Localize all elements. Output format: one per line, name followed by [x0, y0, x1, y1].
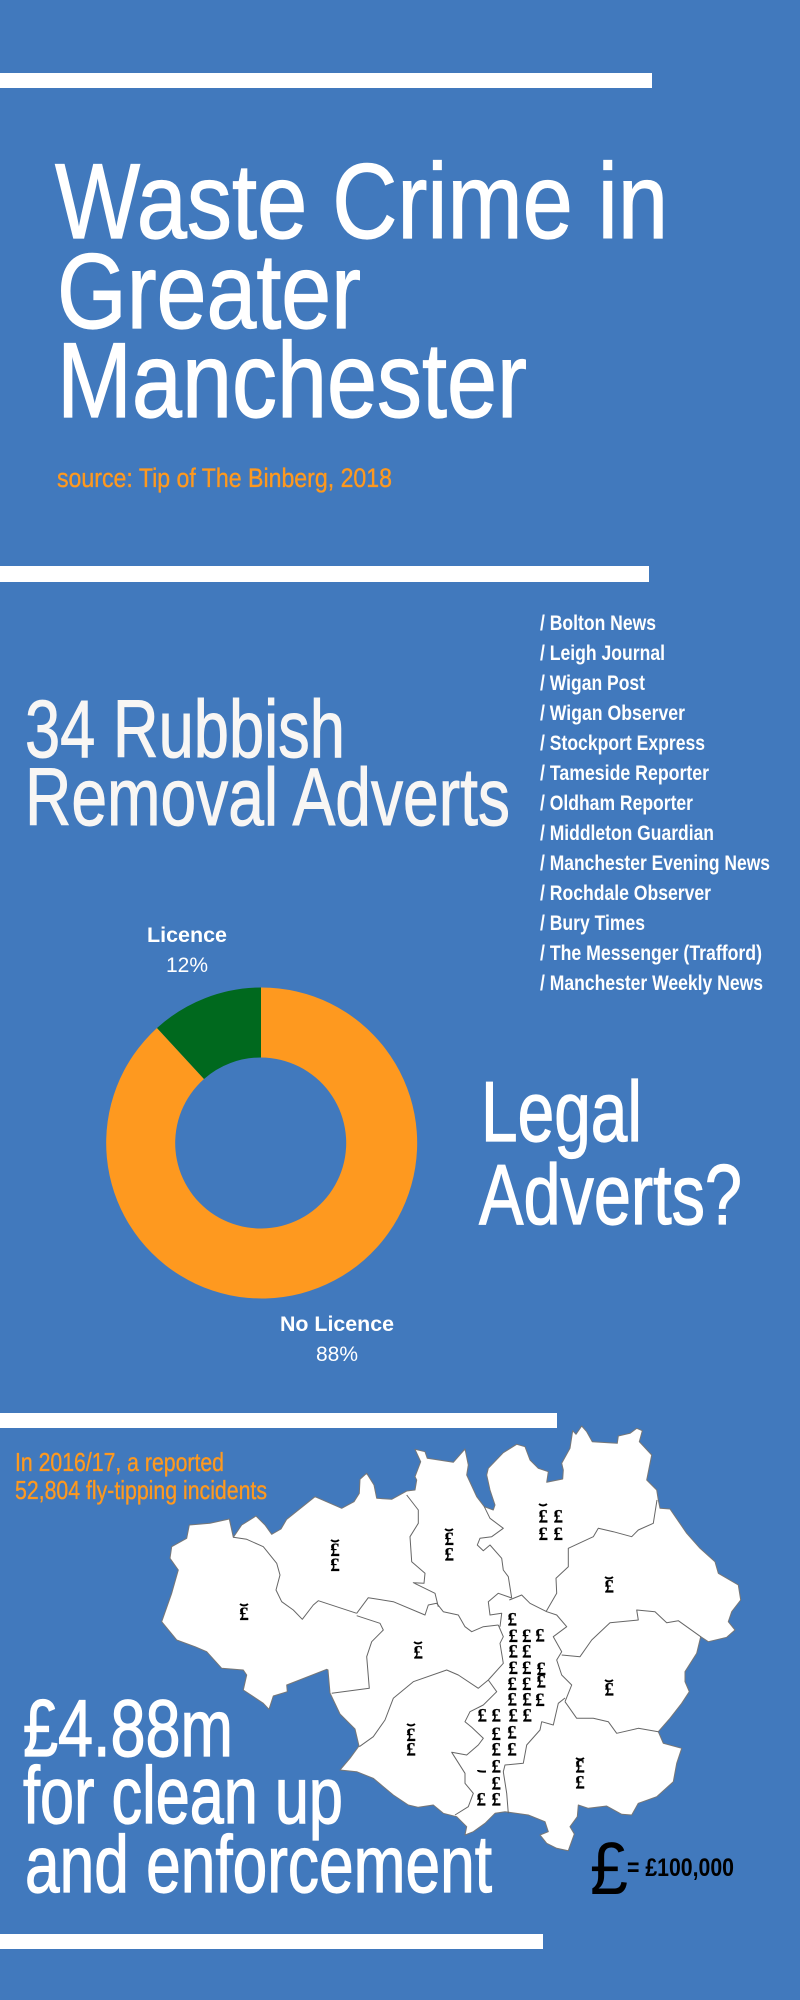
fly-tipping statistic: 52,804 fly-tipping incidents — [15, 1475, 267, 1505]
pound symbols: cost per borough: £ — [575, 1757, 585, 1778]
pound symbols: cost per borough: £ — [523, 1706, 532, 1727]
pound symbols: cost per borough: £ — [508, 1609, 517, 1630]
heading: 34 rubbish removal adverts — [25, 684, 510, 843]
pound symbols: cost per borough: £ — [239, 1604, 249, 1625]
heading: clean up cost: £4.88m — [23, 1684, 233, 1774]
pound symbols: cost per borough: £ — [522, 1641, 531, 1662]
pound symbols: cost per borough: £ — [477, 1789, 486, 1810]
pound symbols: cost per borough: £ — [445, 1529, 454, 1550]
chart label: licence — [147, 924, 227, 977]
map: greater manchester boroughs — [162, 1426, 741, 1851]
newspaper list: / Wigan Post — [540, 672, 645, 695]
pound symbols: cost per borough: £ — [535, 1625, 545, 1646]
chart label: no licence: 88% — [316, 1343, 358, 1366]
pound symbols: cost per borough: £ — [492, 1773, 501, 1794]
segment: licence 12% — [157, 988, 261, 1079]
pound symbols: cost per borough: £ — [508, 1674, 517, 1695]
pound symbols: cost per borough: £ — [330, 1540, 340, 1561]
heading: clean up cost — [23, 1684, 492, 1910]
pound symbols: cost per borough: £ — [507, 1723, 517, 1744]
title — [55, 141, 668, 440]
newspaper list: / Wigan Observer — [540, 702, 685, 725]
title: Manchester — [57, 320, 527, 440]
pound symbols: cost per borough: £ — [509, 1706, 518, 1727]
newspaper list: / Oldham Reporter — [540, 792, 693, 815]
pound symbols: cost per borough: £ — [445, 1545, 454, 1566]
borough boundaries — [233, 1495, 701, 1815]
pound symbols: cost per borough: £ — [535, 1690, 545, 1711]
chart label: licence: 12% — [166, 954, 208, 977]
pound symbols: cost per borough: £ — [492, 1789, 501, 1810]
source line: source: Tip of The Binberg, 2018 — [57, 463, 392, 493]
newspaper list: / Middleton Guardian — [540, 822, 714, 845]
newspaper list: / Leigh Journal — [540, 642, 665, 665]
pound symbols: cost per borough: £ — [507, 1739, 517, 1760]
heading: clean up cost: and enforcement — [25, 1820, 492, 1910]
pound symbols: cost per borough: £ — [554, 1507, 563, 1528]
map legend — [590, 1827, 734, 1910]
pound symbols: cost per borough: £ — [492, 1739, 501, 1760]
donut chart: licence share — [106, 987, 417, 1298]
chart label: licence: Licence — [147, 924, 227, 947]
map outline — [162, 1426, 741, 1851]
pound symbols: cost per borough: £ — [508, 1689, 517, 1710]
pound symbols: cost per borough: £ — [492, 1706, 501, 1727]
pound symbols: cost per borough: £ — [509, 1641, 518, 1662]
pound symbols: cost per borough: £ — [406, 1725, 416, 1746]
pound symbols: cost per borough: £ — [509, 1626, 518, 1647]
pound symbols: cost per borough: £ — [605, 1577, 614, 1598]
pound symbols: cost per borough: £ — [539, 1507, 548, 1528]
map legend: = £100,000 — [627, 1854, 734, 1882]
pound symbols: cost per borough: £ — [330, 1555, 340, 1576]
pound symbols: cost per borough: £ — [414, 1642, 423, 1663]
chart label: no licence: No Licence — [280, 1313, 394, 1336]
newspaper list: / Tameside Reporter — [540, 762, 709, 785]
pound symbols: cost per borough: £ — [522, 1658, 531, 1679]
fly-tipping statistic: In 2016/17, a reported — [15, 1447, 224, 1477]
pound symbols: cost per borough: £ — [537, 1659, 546, 1680]
chart label: no licence — [280, 1313, 394, 1366]
title: Greater — [57, 231, 361, 351]
pound symbols: cost per borough: £ — [605, 1680, 614, 1701]
newspaper list: / Manchester Weekly News — [540, 972, 763, 995]
heading: clean up cost: for clean up — [23, 1751, 343, 1841]
newspaper list — [540, 612, 770, 995]
newspaper list: / Bury Times — [540, 912, 645, 935]
heading: 34 rubbish removal adverts: Removal Adverts — [25, 752, 510, 843]
pound symbols: cost per borough: £ — [492, 1724, 501, 1745]
pound symbols: cost per borough — [239, 1504, 614, 1810]
heading: legal adverts: Legal — [481, 1065, 642, 1160]
newspaper list: / Stockport Express — [540, 732, 705, 755]
newspaper list: / Rochdale Observer — [540, 882, 711, 905]
heading: 34 rubbish removal adverts: 34 Rubbish — [25, 684, 345, 775]
segment: no licence 88% — [106, 987, 417, 1298]
pound symbols: cost per borough: £ — [575, 1773, 585, 1794]
pound symbols: cost per borough: £ — [522, 1674, 531, 1695]
pound symbols: cost per borough: £ — [522, 1689, 532, 1710]
pound symbols: cost per borough: £ — [554, 1524, 563, 1545]
pound symbols: cost per borough: £ — [492, 1757, 501, 1778]
fly-tipping statistic — [15, 1447, 267, 1505]
pound symbols: cost per borough: £ — [478, 1706, 487, 1727]
pound symbols: cost per borough: £ — [522, 1626, 531, 1647]
newspaper list: / Bolton News — [540, 612, 656, 635]
pound symbols: cost per borough: £ — [406, 1739, 416, 1760]
newspaper list: / The Messenger (Trafford) — [540, 942, 762, 965]
map legend: £ — [590, 1827, 628, 1910]
pound symbols: cost per borough: £ — [537, 1671, 546, 1692]
title: Waste Crime in — [55, 141, 668, 261]
pound symbols: cost per borough: £ — [539, 1524, 548, 1545]
pound symbols: cost per borough: £ — [509, 1658, 518, 1679]
heading: legal adverts — [479, 1065, 742, 1243]
